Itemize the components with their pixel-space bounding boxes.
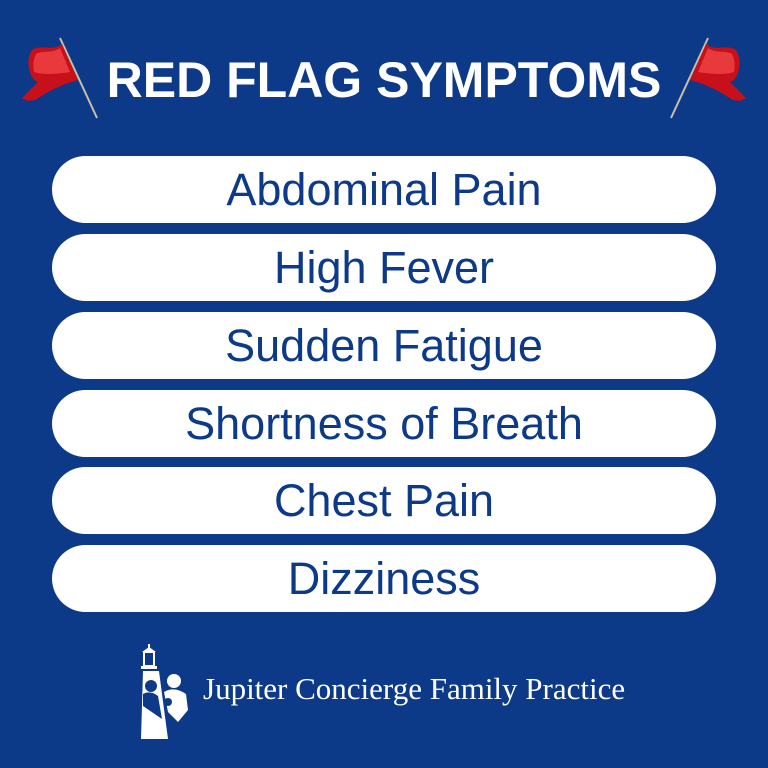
pill: Abdominal Pain: Abdominal Pain bbox=[226, 164, 542, 215]
pill: Chest Pain: Chest Pain bbox=[274, 475, 494, 526]
logo bbox=[141, 644, 625, 739]
pill: Chest Pain bbox=[52, 467, 716, 534]
pill: Dizziness: Dizziness bbox=[288, 553, 480, 604]
pill: Abdominal Pain bbox=[52, 156, 716, 223]
pill: High Fever: High Fever bbox=[274, 242, 494, 293]
icon: right red flag bbox=[670, 38, 746, 118]
logo text: Jupiter Concierge Family Practice bbox=[203, 671, 625, 706]
icon: left red flag bbox=[22, 38, 98, 118]
title: RED FLAG SYMPTOMS bbox=[107, 52, 661, 108]
pill: Shortness of Breath bbox=[52, 390, 716, 457]
pill: Sudden Fatigue bbox=[52, 312, 716, 379]
pill: Shortness of Breath: Shortness of Breath bbox=[185, 398, 583, 449]
pill: Sudden Fatigue: Sudden Fatigue bbox=[225, 320, 543, 371]
pill: High Fever bbox=[52, 234, 716, 301]
pill: Dizziness bbox=[52, 545, 716, 612]
icon: lighthouse with family bbox=[141, 644, 188, 739]
